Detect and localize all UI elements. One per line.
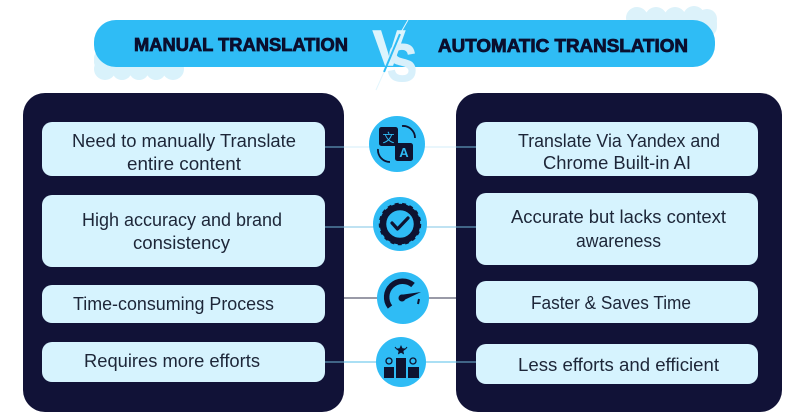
panel: automatic translation xyxy=(456,93,782,412)
card: manual content xyxy=(42,122,325,176)
card: yandex: Chrome Built-in AI xyxy=(543,153,691,173)
panel: manual translation xyxy=(23,93,344,412)
icon: quality badge xyxy=(373,197,427,251)
card: less efforts: Less efforts and efficient xyxy=(518,355,719,375)
icon: translate xyxy=(369,116,425,172)
decorative cloud: right xyxy=(626,6,717,36)
icon: speedometer xyxy=(377,272,429,324)
icon: translate: A xyxy=(399,145,409,160)
VS badge: V xyxy=(373,22,405,76)
decorative cloud: left xyxy=(94,50,185,80)
card: context: Accurate but lacks context xyxy=(511,207,726,227)
VS badge: S xyxy=(387,34,417,93)
card: yandex: Translate Via Yandex and xyxy=(518,131,720,151)
card: faster: Faster & Saves Time xyxy=(531,293,691,313)
card: efforts: Requires more efforts xyxy=(84,351,260,371)
card: accuracy: consistency xyxy=(133,233,230,253)
card: time xyxy=(42,285,325,323)
card: manual content: Need to manually Translate xyxy=(72,131,296,151)
VS badge xyxy=(373,20,417,93)
card: less efforts xyxy=(476,344,758,384)
icon: translate: 文 xyxy=(382,129,395,146)
icon: podium xyxy=(376,337,426,387)
header banner xyxy=(94,20,715,67)
heading: manual translation: MANUAL TRANSLATION xyxy=(134,35,348,55)
card: efforts xyxy=(42,342,325,382)
card: accuracy: High accuracy and brand xyxy=(82,210,282,230)
card: time: Time-consuming Process xyxy=(73,294,274,314)
card: faster xyxy=(476,281,758,323)
card: yandex xyxy=(476,122,758,176)
card: manual content: entire content xyxy=(127,154,241,174)
card: context: awareness xyxy=(576,231,661,251)
connector lines xyxy=(325,147,476,362)
heading: automatic translation: AUTOMATIC TRANSLATION xyxy=(438,36,688,56)
card: accuracy xyxy=(42,195,325,267)
card: context xyxy=(476,193,758,265)
